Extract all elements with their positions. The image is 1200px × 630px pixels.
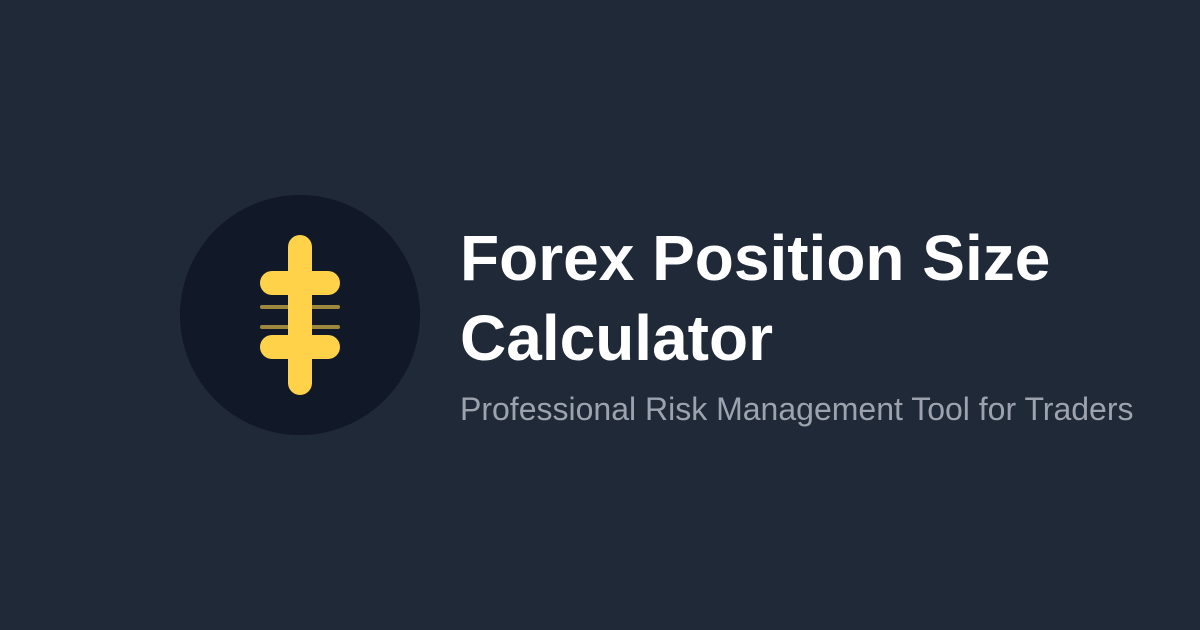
title — [460, 222, 1050, 374]
title: Calculator — [460, 302, 773, 374]
subtitle: Professional Risk Management Tool for Traders — [460, 391, 1134, 427]
icon: position size logo — [180, 195, 420, 435]
title: Forex Position Size — [460, 222, 1050, 294]
